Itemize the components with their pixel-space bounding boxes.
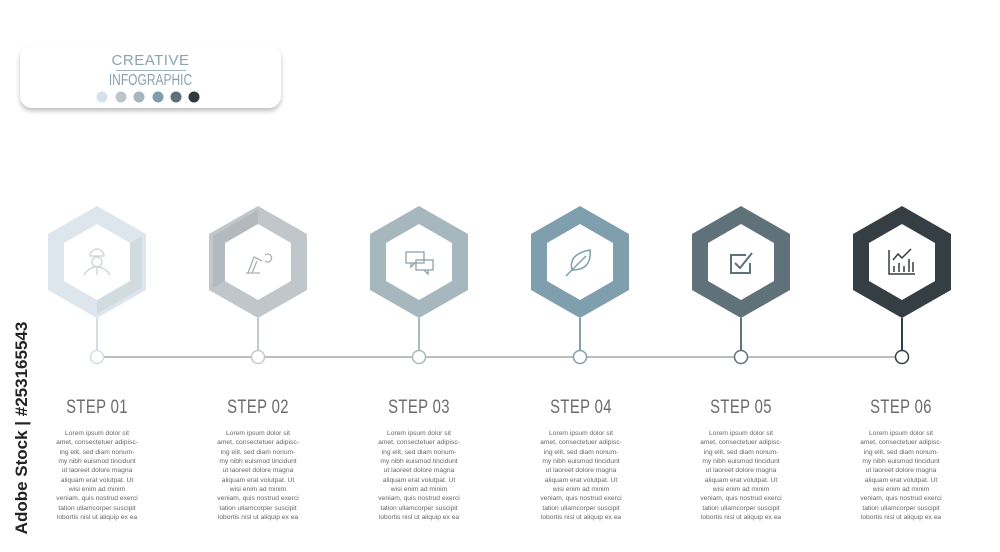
step 5 text: veniam, quis nostrud exerci — [700, 495, 782, 502]
step 6 text — [860, 397, 942, 521]
step 1 text: ut laoreet dolore magna — [62, 467, 132, 474]
step 5 text: amet, consectetuer adipisc- — [700, 439, 782, 446]
step 1 hexagon — [48, 206, 146, 364]
step 5 text — [700, 397, 782, 521]
step 3 text: my nibh euismod tincidunt — [380, 458, 458, 465]
step 6 text: lobortis nisl ut aliquip ex ea — [861, 514, 941, 521]
title card — [20, 45, 281, 108]
step 3 text: amet, consectetuer adipisc- — [378, 439, 460, 446]
step 6 text: ing elit, sed diam nonum- — [864, 449, 938, 456]
color dots — [96, 92, 200, 102]
step 6 text: aliquam erat volutpat. Ut — [865, 477, 937, 484]
step 5 text: my nibh euismod tincidunt — [702, 458, 780, 465]
step 5 text: ut laoreet dolore magna — [706, 467, 776, 474]
step 4 text: tation ullamcorper suscipit — [542, 505, 620, 512]
step 6 text: STEP 06 — [870, 397, 932, 418]
step 1 text: ing elit, sed diam nonum- — [60, 449, 134, 456]
step 2 text: amet, consectetuer adipisc- — [217, 439, 299, 446]
title text — [109, 52, 192, 89]
step 6 hexagon — [853, 206, 951, 364]
step 3 hexagon — [370, 206, 468, 364]
step 2 text: veniam, quis nostrud exerci — [217, 495, 299, 502]
step 2 text — [217, 397, 299, 521]
step 3 text: STEP 03 — [388, 397, 450, 418]
title text: CREATIVE — [112, 52, 189, 69]
step 1 text: lobortis nisl ut aliquip ex ea — [57, 514, 137, 521]
title text: INFOGRAPHIC — [109, 72, 192, 89]
step 1 text: STEP 01 — [66, 397, 128, 418]
step 5 text: lobortis nisl ut aliquip ex ea — [701, 514, 781, 521]
step 4 text: lobortis nisl ut aliquip ex ea — [541, 514, 621, 521]
step 4 text: aliquam erat volutpat. Ut — [545, 477, 617, 484]
step 1 text: amet, consectetuer adipisc- — [56, 439, 138, 446]
watermark id: Adobe Stock | #253165543 — [12, 322, 31, 534]
step 1 text: my nibh euismod tincidunt — [58, 458, 136, 465]
step 2 hexagon — [209, 206, 307, 364]
step 3 text: aliquam erat volutpat. Ut — [383, 477, 455, 484]
step 3 text: wisi enim ad minim — [391, 486, 447, 493]
step 3 text: Lorem ipsum dolor sit — [387, 430, 451, 437]
step 2 text: STEP 02 — [227, 397, 289, 418]
step 4 text: amet, consectetuer adipisc- — [540, 439, 622, 446]
step 5 text: wisi enim ad minim — [713, 486, 769, 493]
step 3 text: tation ullamcorper suscipit — [380, 505, 458, 512]
step 5 text: Lorem ipsum dolor sit — [709, 430, 773, 437]
step 1 text: wisi enim ad minim — [69, 486, 125, 493]
step 5 text: tation ullamcorper suscipit — [702, 505, 780, 512]
step 6 text: veniam, quis nostrud exerci — [860, 495, 942, 502]
step 4 text: veniam, quis nostrud exerci — [540, 495, 622, 502]
step 3 text: lobortis nisl ut aliquip ex ea — [379, 514, 459, 521]
step 4 text — [540, 397, 622, 521]
step 4 text: Lorem ipsum dolor sit — [549, 430, 613, 437]
step 3 text: veniam, quis nostrud exerci — [378, 495, 460, 502]
step 2 text: aliquam erat volutpat. Ut — [222, 477, 294, 484]
step 2 text: ing elit, sed diam nonum- — [221, 449, 295, 456]
step 4 text: ing elit, sed diam nonum- — [544, 449, 618, 456]
step 1 text: veniam, quis nostrud exerci — [56, 495, 138, 502]
step 2 text: Lorem ipsum dolor sit — [226, 430, 290, 437]
step 1 text: tation ullamcorper suscipit — [58, 505, 136, 512]
step 4 hexagon — [531, 206, 629, 364]
step 2 text: ut laoreet dolore magna — [223, 467, 293, 474]
step 3 text: ing elit, sed diam nonum- — [382, 449, 456, 456]
step 5 text: ing elit, sed diam nonum- — [704, 449, 778, 456]
step 5 text: aliquam erat volutpat. Ut — [705, 477, 777, 484]
step 1 text: Lorem ipsum dolor sit — [65, 430, 129, 437]
step 6 text: ut laoreet dolore magna — [866, 467, 936, 474]
step 6 text: Lorem ipsum dolor sit — [869, 430, 933, 437]
step 2 text: my nibh euismod tincidunt — [219, 458, 297, 465]
step 1 text — [56, 397, 138, 521]
step 2 text: lobortis nisl ut aliquip ex ea — [218, 514, 298, 521]
step 5 text: STEP 05 — [710, 397, 772, 418]
step 4 text: ut laoreet dolore magna — [546, 467, 616, 474]
step 2 text: tation ullamcorper suscipit — [219, 505, 297, 512]
step 6 text: amet, consectetuer adipisc- — [860, 439, 942, 446]
step 4 text: STEP 04 — [550, 397, 612, 418]
step 6 text: my nibh euismod tincidunt — [862, 458, 940, 465]
step 4 text: my nibh euismod tincidunt — [542, 458, 620, 465]
step 4 text: wisi enim ad minim — [553, 486, 609, 493]
step 6 text: tation ullamcorper suscipit — [862, 505, 940, 512]
step 6 text: wisi enim ad minim — [873, 486, 929, 493]
step 2 text: wisi enim ad minim — [230, 486, 286, 493]
step 3 text: ut laoreet dolore magna — [384, 467, 454, 474]
step 3 text — [378, 397, 460, 521]
step 5 hexagon — [692, 206, 790, 364]
step 1 text: aliquam erat volutpat. Ut — [61, 477, 133, 484]
